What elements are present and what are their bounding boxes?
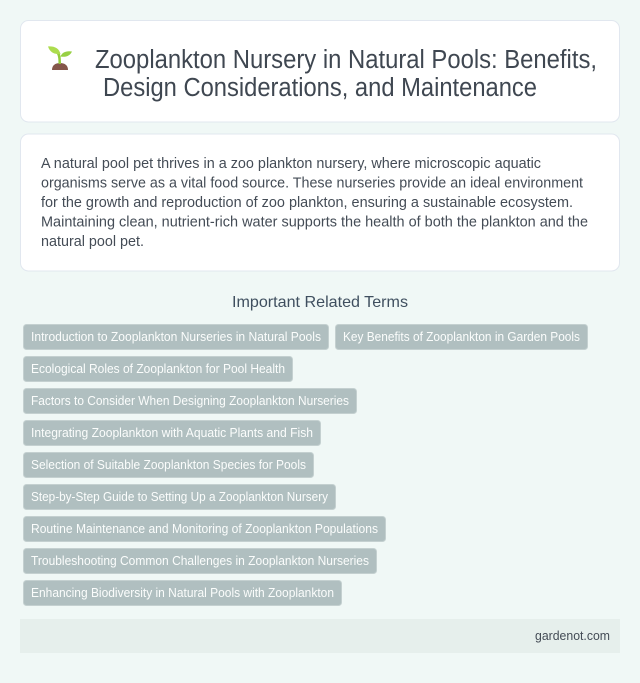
tag: key benefits (336, 324, 588, 350)
tag: biodiversity (24, 580, 342, 606)
footer source: gardenot.com (535, 629, 610, 643)
tag: species selection (24, 452, 314, 478)
tag: biodiversity: Enhancing Biodiversity in Natural Pools with Zooplankton (31, 586, 334, 600)
tag: species selection: Selection of Suitable Zooplankton Species for Pools (31, 458, 306, 472)
tag: setup guide (24, 484, 336, 510)
tag: integrating: Integrating Zooplankton with Aquatic Plants and Fish (31, 426, 313, 440)
tag: design factors: Factors to Consider When Designing Zooplankton Nurseries (31, 394, 349, 408)
introduction paragraph: Maintaining clean, nutrient-rich water supports the health of both the plankton and the (41, 214, 588, 230)
tag: troubleshooting: Troubleshooting Common Challenges in Zooplankton Nurseries (31, 554, 369, 568)
title text (95, 46, 597, 102)
panel: title card (20, 20, 620, 122)
tag: maintenance (24, 516, 386, 542)
tag: setup guide: Step-by-Step Guide to Setting Up a Zooplankton Nursery (31, 490, 329, 504)
introduction paragraph (41, 156, 588, 250)
tag: introduction (24, 324, 328, 350)
title text: Zooplankton Nursery in Natural Pools: Benefits, (95, 46, 597, 74)
introduction paragraph: for the growth and reproduction of zoo plankton, ensuring a sustainable ecosystem. (41, 195, 573, 211)
tag: integrating (24, 420, 320, 446)
introduction paragraph: organisms serve as a vital food source. These nurseries provide an ideal environment (41, 176, 583, 192)
icon: sprout (48, 46, 72, 70)
tag: design factors (24, 388, 356, 414)
tag: introduction: Introduction to Zooplankton Nurseries in Natural Pools (31, 330, 321, 344)
tag: key benefits: Key Benefits of Zooplankton in Garden Pools (343, 330, 580, 344)
tag: ecological roles: Ecological Roles of Zooplankton for Pool Health (31, 362, 285, 376)
introduction paragraph: natural pool pet. (41, 234, 144, 250)
panel: introduction card (20, 134, 620, 271)
tag: maintenance: Routine Maintenance and Monitoring of Zooplankton Populations (31, 522, 378, 536)
introduction paragraph: A natural pool pet thrives in a zoo plankton nursery, where microscopic aquatic (41, 156, 542, 172)
tag: ecological roles (24, 356, 292, 382)
heading: important related terms: Important Related Terms (232, 294, 408, 311)
tag list (24, 324, 588, 606)
footer bar (20, 619, 620, 653)
title text: Design Considerations, and Maintenance (103, 74, 537, 102)
tag: troubleshooting (24, 548, 376, 574)
